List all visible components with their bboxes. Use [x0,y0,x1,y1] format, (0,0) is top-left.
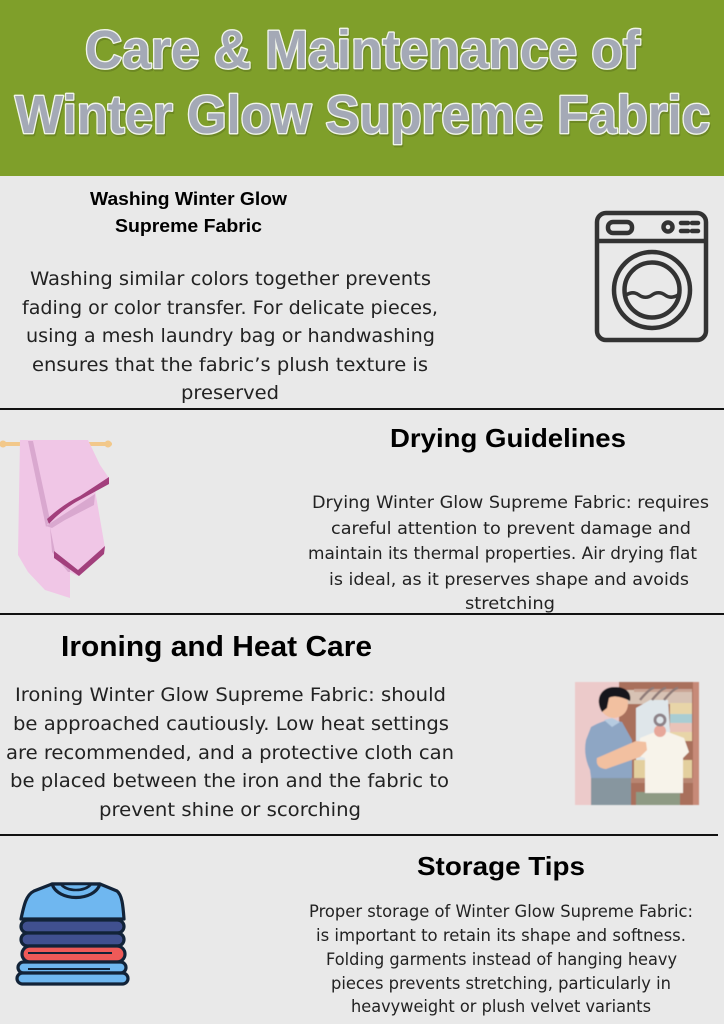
heading: washing: Supreme Fabric [115,216,262,236]
text: drying body: is ideal, as it preserves shape and avoids [329,569,689,589]
text: ironing body: Ironing Winter Glow Supreme Fabric: should [15,684,446,706]
divider 2 [0,613,724,615]
text: washing body: preserved [181,382,279,404]
panel: washing [22,189,706,404]
text: storage body [309,901,693,1016]
heading: storage: Storage Tips [417,851,585,881]
text: drying body: careful attention to prevent damage and [331,518,691,538]
text: ironing body: be approached cautiously. Low heat settings [13,713,449,735]
text: storage body: Proper storage of Winter Glow Supreme Fabric: [309,901,693,921]
icon: washing machine [597,213,706,340]
icon: folded clothes stack [17,884,128,984]
title banner: Care & Maintenance of [86,22,642,82]
text: storage body: pieces prevents stretching, particularly in [331,973,671,993]
text: drying body [308,492,709,613]
text: washing body: using a mesh laundry bag or handwashing [26,325,435,347]
title banner [0,0,724,176]
text: ironing body: prevent shine or scorching [99,799,361,821]
text: storage body: Folding garments instead of hanging heavy [326,949,677,969]
text: ironing body: be placed between the iron and the fabric to [10,770,449,792]
text: ironing body: are recommended, and a protective cloth can [6,742,454,764]
text: washing body [22,268,438,404]
illustration: man with wardrobe [575,682,699,805]
text: washing body: ensures that the fabric’s plush texture is [32,354,428,376]
heading: washing [90,189,288,236]
title banner: Care & Maintenance of [85,20,641,80]
text: drying body: stretching [465,593,555,613]
text: ironing body [6,684,454,821]
icon: hanging towel [0,440,112,598]
text: drying body: maintain its thermal properties. Air drying flat [308,543,697,563]
panel: drying [0,423,709,613]
text: storage body: heavyweight or plush velvet variants [351,996,651,1016]
divider 1 [0,408,724,410]
text: washing body: fading or color transfer. For delicate pieces, [22,297,438,319]
heading: ironing: Ironing and Heat Care [61,631,372,663]
panel: storage [17,851,693,1016]
text: washing body: Washing similar colors together prevents [30,268,431,290]
heading: washing: Washing Winter Glow [90,189,288,209]
heading: drying: Drying Guidelines [390,423,626,453]
text: drying body: Drying Winter Glow Supreme Fabric: requires [312,492,709,512]
panel: ironing [6,631,699,821]
text: storage body: is important to retain its shape and softness. [316,925,686,945]
divider 3 [0,834,718,836]
